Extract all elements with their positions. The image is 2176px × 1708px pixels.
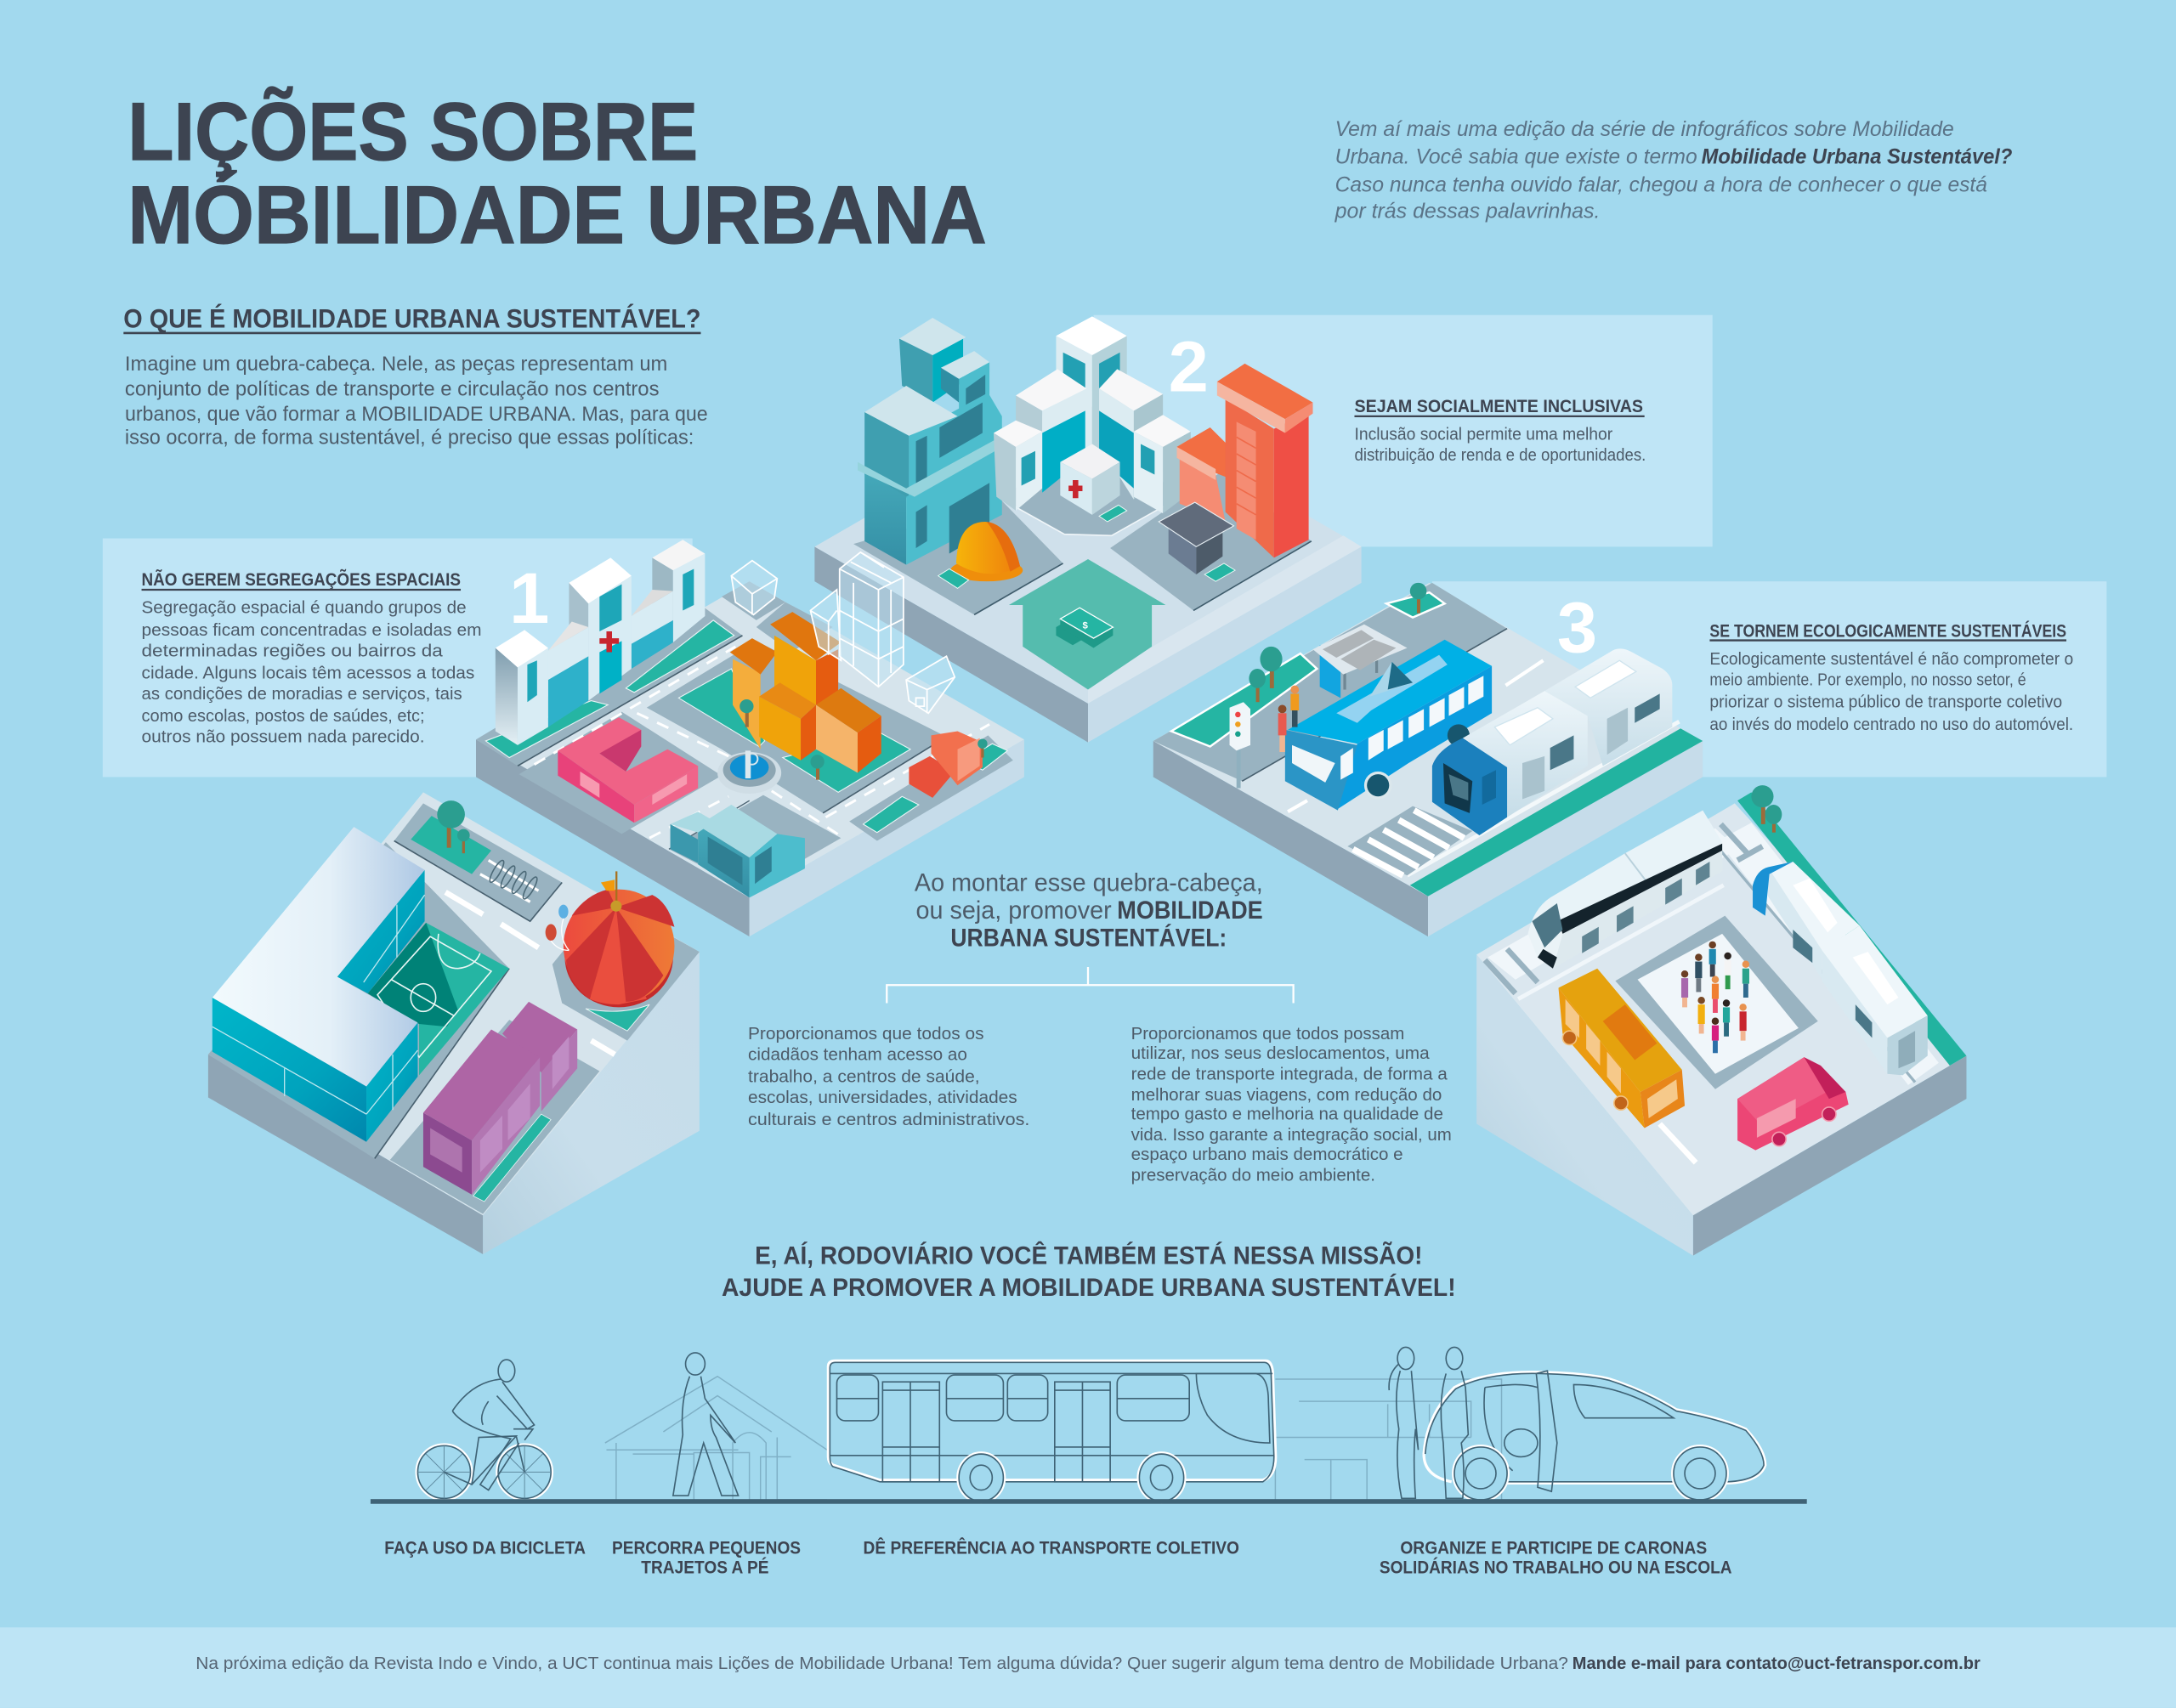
central plaza [1615,916,1818,1089]
panel 2 body: Inclusão social permite uma melhor [1354,426,1612,444]
circus tent [564,871,674,1007]
intro text: Caso nunca tenha ouvido falar, chegou a hora de conhecer o que está [1335,172,1987,196]
panel 2 body: distribuição de renda e de oportunidades. [1354,446,1646,465]
section paragraph: isso ocorra, de forma sustentável, é preciso que essas políticas: [125,427,694,450]
glass L building [212,827,425,1142]
balloons [546,905,569,950]
number 3: 3 [1557,586,1597,667]
pink van [1737,1057,1849,1151]
panel: 2 background [1094,315,1713,546]
panel 3 body: Ecologicamente sustentável é não comprometer o [1709,650,2073,669]
section paragraph [125,353,708,450]
icon: helmet [950,522,1023,581]
center statement: URBANA SUSTENTÁVEL: [950,924,1227,953]
icon: money stack: $ [1082,621,1088,631]
panel 3 body [1709,650,2073,734]
left benefit text: trabalho, a centros de saúde, [748,1068,980,1087]
line art: carpool couple [1389,1347,1468,1498]
white hospital [994,316,1191,515]
panel 3 heading: SE TORNEM ECOLOGICAMENTE SUSTENTÁVEIS [1709,619,2066,641]
intro text [1334,117,2012,223]
label: bicycle: FAÇA USO DA BICICLETA [384,1539,586,1558]
label: public transport: DÊ PREFERÊNCIA AO TRANSPORTE COLETIVO [864,1538,1239,1558]
fountain [717,750,781,794]
panel 1 body [142,599,482,747]
title [128,87,987,261]
label: walk: PERCORRA PEQUENOS [612,1539,801,1558]
trees [437,800,470,853]
panel 1 body: determinadas regiões ou bairros da [142,642,444,660]
line art: bus [829,1361,1275,1502]
white outline buildings [731,552,955,713]
panel 2 text [1354,397,1646,465]
panel 1 body: outros não possuem nada parecido. [142,728,425,747]
puzzle piece: leisure block [208,792,700,1254]
green lawns [485,620,1007,833]
panel 2 heading: SEJAM SOCIALMENTE INCLUSIVAS [1354,397,1643,416]
call to action heading: AJUDE A PROMOVER A MOBILIDADE URBANA SUSTENTÁVEL! [722,1273,1456,1302]
footer [0,1627,2176,1708]
intro text: Urbana. Você sabia que existe o termo [1335,145,1697,169]
right benefit text: espaço urbano mais democrático e [1131,1145,1403,1164]
puzzle piece: integrated transit block [1476,785,1966,1256]
right benefit text [1131,1025,1452,1185]
trees [740,699,988,780]
footer: Na próxima edição da Revista Indo e Vindo, a UCT continua mais Lições de Mobilidade Urbana! Tem alguma dúvida? Quer sugerir algum tema dentro de Mobilidade Urbana? [196,1654,1568,1673]
panel 3 body: priorizar o sistema público de transporte coletivo [1709,693,2062,712]
center statement [915,868,1263,953]
puzzle piece: bus corridor block [1153,583,1703,936]
label: walk [612,1539,801,1578]
intro text: Mobilidade Urbana Sustentável? [1702,145,2012,169]
line art: cyclist [416,1360,552,1500]
bus [1285,640,1492,811]
purple building [423,1002,577,1202]
light rail train [1528,811,1722,969]
panel 1 heading: NÃO GEREM SEGREGAÇÕES ESPACIAIS [142,568,461,590]
section paragraph: conjunto de políticas de transporte e circulação nos centros [125,378,660,400]
left benefit text [748,1025,1029,1129]
section heading: what is sustainable urban mobility: O QUE É MOBILIDADE URBANA SUSTENTÁVEL? [123,303,700,333]
panel: 1 background [103,539,693,777]
football field [368,923,509,1075]
title: MÓBILIDADE URBANA [128,170,987,261]
section paragraph: Imagine um quebra-cabeça. Nele, as peças representam um [125,353,667,376]
intro text: Vem aí mais uma edição da série de infográficos sobre Mobilidade [1335,117,1954,141]
number 1: 1 [509,557,549,638]
panel 1 body: pessoas ficam concentradas e isoladas em [142,621,482,640]
bracket connector [887,967,1294,1004]
center statement: ou seja, promover [916,896,1112,925]
left benefit text: Proporcionamos que todos os [748,1025,984,1043]
intro text: por trás dessas palavrinhas. [1334,199,1600,223]
panel 1 body: como escolas, postos de saúdes, etc; [142,707,425,726]
white hospital [496,540,705,745]
puzzle piece: health center block [814,316,1362,743]
action labels [384,1538,1732,1578]
BRT train [1432,648,1672,835]
teal low building [671,805,805,897]
people at stop [1278,686,1299,752]
metro train [1753,862,1928,1075]
teal building [858,318,1007,565]
left benefit text: escolas, universidades, atividades [748,1089,1017,1107]
road dashes [445,892,615,1055]
puzzle piece: city segregation block [476,540,1024,936]
ground line [371,1499,1807,1504]
label: carpool: ORGANIZE E PARTICIPE DE CARONAS [1400,1539,1707,1558]
left benefit text: cidadãos tenham acesso ao [748,1045,967,1064]
zebra crossing [1347,806,1472,875]
right benefit text: rede de transporte integrada, de forma a [1131,1065,1448,1083]
left benefit text: culturais e centros administrativos. [748,1111,1029,1129]
center statement: MOBILIDADE [1117,896,1263,925]
panel 3 body: ao invés do modelo centrado no uso do automóvel. [1709,715,2073,734]
title: LIÇÕES SOBRE [128,87,698,178]
call to action heading [722,1241,1456,1302]
panel: 3 background [1432,581,2106,777]
orange building [730,612,881,772]
panel 1 body: cidade. Alguns locais têm acessos a todas [142,664,474,682]
panel 3 text [1709,619,2073,734]
panel 2 body [1354,426,1646,465]
line art: pedestrian [673,1353,739,1496]
crowd [1681,942,1749,1053]
panel 1 text [142,568,482,747]
trees [1249,583,1426,702]
right benefit text: preservação do meio ambiente. [1131,1166,1375,1185]
pink building [558,717,698,823]
icon: money stack [1056,608,1113,648]
orange bus [1558,969,1685,1128]
arrow plaza [1009,559,1165,690]
right benefit text: utilizar, nos seus deslocamentos, uma [1131,1044,1430,1063]
right benefit text: Proporcionamos que todos possam [1131,1025,1404,1043]
road dashes [535,647,989,838]
panel 1 body: Segregação espacial é quando grupos de [142,599,467,618]
trees [1751,785,1782,833]
section paragraph: urbanos, que vão formar a MOBILIDADE URBANA. Mas, para que [125,404,708,426]
panel 1 body: as condições de moradias e serviços, tais [142,685,462,704]
number 2: 2 [1169,326,1209,407]
red-orange tower [1176,364,1312,557]
center statement: Ao montar esse quebra-cabeça, [915,868,1263,896]
right benefit text: melhorar suas viagens, com redução do [1131,1086,1442,1105]
icon: banknotes [938,505,1235,588]
traffic light [1230,702,1250,788]
call to action heading: E, AÍ, RODOVIÁRIO VOCÊ TAMBÉM ESTÁ NESSA MISSÃO! [755,1241,1422,1270]
label: walk: TRAJETOS A PÉ [641,1558,769,1578]
bus shelter [1312,625,1408,698]
footer: Mande e-mail para contato@uct-fetranspor.com.br [1572,1654,1980,1673]
red small building [909,732,983,798]
label: carpool: SOLIDÁRIAS NO TRABALHO OU NA ESCOLA [1380,1558,1732,1578]
line art: car [1424,1371,1765,1502]
label: carpool [1380,1539,1732,1578]
line art: houses background [605,1377,1502,1500]
grey pavilion [1159,502,1233,574]
bike rack [480,859,540,902]
panel 3 body: meio ambiente. Por exemplo, no nosso setor, é [1709,671,2026,690]
right benefit text: tempo gasto e melhoria na qualidade de [1131,1106,1443,1124]
right benefit text: vida. Isso garante a integração social, um [1131,1126,1452,1145]
